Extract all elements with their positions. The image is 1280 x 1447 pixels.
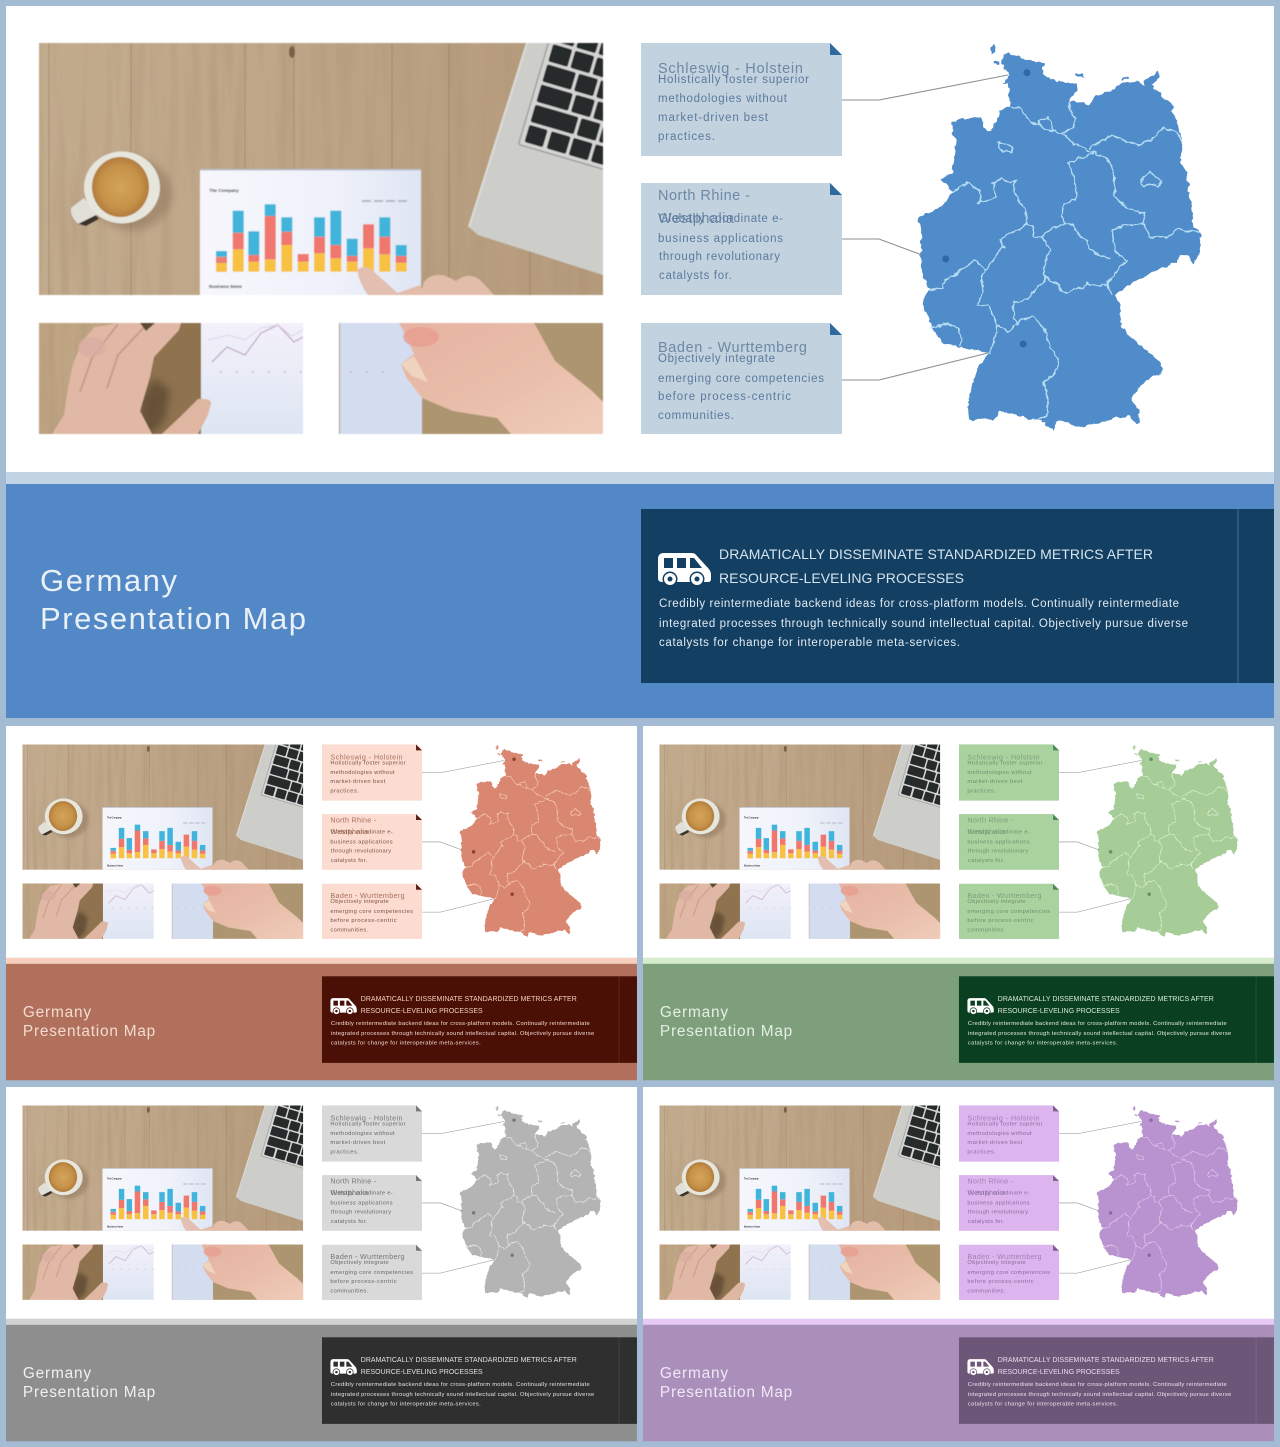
callout: Schleswig-Holstein: market-driven best <box>967 1140 1023 1146</box>
callout: North Rhine-Westphalia: catalysts for. <box>968 1219 1005 1225</box>
callout: Schleswig-Holstein: Schleswig - Holstein <box>967 752 1040 761</box>
leader lines <box>842 75 1008 380</box>
callout: Schleswig-Holstein: Holistically foster superior <box>658 74 809 86</box>
description text: integrated processes through technically sound intellectual capital. Objectively pursue diverse <box>968 1392 1231 1398</box>
map markers <box>472 1118 516 1257</box>
callout: North Rhine-Westphalia: North Rhine - <box>658 188 750 204</box>
callout: Baden-Wurttemberg: before process-centric <box>658 391 791 403</box>
title: Presentation Map <box>23 1023 155 1040</box>
dark info panel <box>322 1337 637 1424</box>
title <box>23 1365 155 1401</box>
callout: Schleswig-Holstein: market-driven best <box>658 112 769 124</box>
description text: catalysts for change for interoperable meta-services. <box>968 1401 1118 1407</box>
callout: North Rhine-Westphalia: Westphalia <box>658 211 735 227</box>
callout: Schleswig-Holstein: methodologies without <box>967 1131 1032 1137</box>
callout: Schleswig-Holstein: Schleswig - Holstein <box>330 1113 403 1122</box>
title <box>40 563 306 636</box>
slide panel: white <box>643 1087 1274 1319</box>
description text <box>331 1382 594 1407</box>
description text: Credibly reintermediate backend ideas for cross-platform models. Continually reintermediate <box>968 1021 1227 1027</box>
callout: Schleswig-Holstein <box>322 744 422 801</box>
heading: RESOURCE-LEVELING PROCESSES <box>998 1008 1120 1015</box>
photo collage: desk with chart <box>22 1093 339 1300</box>
map markers <box>1109 1118 1153 1257</box>
callout: Schleswig-Holstein: Schleswig - Holstein <box>330 752 403 761</box>
callout: Baden-Wurttemberg: communities. <box>330 928 369 934</box>
callout: Baden-Wurttemberg <box>322 1245 422 1300</box>
map: Germany <box>460 745 601 938</box>
callout: Schleswig-Holstein: methodologies without <box>658 93 788 105</box>
description text: Credibly reintermediate backend ideas for cross-platform models. Continually reintermediate <box>968 1382 1227 1388</box>
description text: integrated processes through technically sound intellectual capital. Objectively pursue diverse <box>331 1031 594 1037</box>
description text: integrated processes through technically sound intellectual capital. Objectively pursue diverse <box>331 1392 594 1398</box>
heading <box>998 1357 1214 1376</box>
heading: DRAMATICALLY DISSEMINATE STANDARDIZED METRICS AFTER <box>361 1357 577 1364</box>
map markers <box>1109 757 1153 896</box>
callout: Baden-Wurttemberg: Objectively integrate <box>330 899 389 905</box>
callout: Baden-Wurttemberg: Baden - Wurttemberg <box>658 340 807 356</box>
callout: North Rhine-Westphalia: Westphalia <box>967 1188 1005 1197</box>
description text <box>968 1382 1231 1407</box>
leader lines <box>422 760 505 912</box>
callout: Schleswig-Holstein: Schleswig - Holstein <box>658 61 803 77</box>
heading <box>361 1357 577 1376</box>
description text: Credibly reintermediate backend ideas for cross-platform models. Continually reintermediate <box>659 598 1179 610</box>
callout: North Rhine-Westphalia: Globally coordinate e- <box>968 829 1030 835</box>
callout: Baden-Wurttemberg: before process-centric <box>967 918 1034 924</box>
heading <box>719 546 1153 586</box>
callout: North Rhine-Westphalia: North Rhine - <box>967 1177 1014 1186</box>
callout: Schleswig-Holstein: Holistically foster superior <box>967 760 1043 766</box>
heading <box>361 996 577 1015</box>
callout: North Rhine-Westphalia: business applications <box>967 1200 1030 1206</box>
description text: integrated processes through technically sound intellectual capital. Objectively pursue diverse <box>659 618 1188 630</box>
slide: purple variant <box>643 1087 1274 1441</box>
callout: Schleswig-Holstein: practices. <box>967 789 996 795</box>
callout: North Rhine-Westphalia: through revolutionary <box>331 1209 391 1215</box>
heading: DRAMATICALLY DISSEMINATE STANDARDIZED METRICS AFTER <box>719 546 1153 562</box>
callout: Baden-Wurttemberg <box>959 1245 1059 1300</box>
icon: van <box>658 553 711 586</box>
callout: Baden-Wurttemberg: Objectively integrate <box>967 1260 1026 1266</box>
dark info panel <box>959 1337 1274 1424</box>
callout: Schleswig-Holstein: practices. <box>658 131 715 143</box>
callout: North Rhine-Westphalia: Westphalia <box>330 1188 368 1197</box>
slide panel: white <box>6 1087 637 1319</box>
callout: Baden-Wurttemberg: before process-centric <box>330 1279 397 1285</box>
callout: North Rhine-Westphalia: Globally coordinate e- <box>331 829 393 835</box>
title band <box>6 964 637 1080</box>
dark info panel <box>641 509 1274 683</box>
callout: Baden-Wurttemberg: Baden - Wurttemberg <box>967 891 1042 900</box>
callout: Baden-Wurttemberg: Objectively integrate <box>967 899 1026 905</box>
callout: North Rhine-Westphalia: Globally coordinate e- <box>968 1190 1030 1196</box>
description text: catalysts for change for interoperable meta-services. <box>659 637 960 649</box>
title: Presentation Map <box>660 1023 792 1040</box>
callout: Schleswig-Holstein: market-driven best <box>330 1140 386 1146</box>
callout: Baden-Wurttemberg: before process-centric <box>330 918 397 924</box>
callout: North Rhine-Westphalia: through revolutionary <box>659 251 780 263</box>
map: Germany <box>1097 1106 1238 1299</box>
description text: catalysts for change for interoperable meta-services. <box>331 1401 481 1407</box>
callout: Schleswig-Holstein: Holistically foster superior <box>330 760 406 766</box>
callout: Schleswig-Holstein: market-driven best <box>967 779 1023 785</box>
slide panel: white <box>643 726 1274 958</box>
callout: North Rhine-Westphalia <box>641 183 842 295</box>
callout: Baden-Wurttemberg: Objectively integrate <box>330 1260 389 1266</box>
callout: North Rhine-Westphalia: business applications <box>658 233 783 245</box>
slide: red variant <box>6 726 637 1080</box>
callout: Schleswig-Holstein: methodologies without <box>967 770 1032 776</box>
dark info panel <box>322 976 637 1063</box>
photo collage: desk with chart <box>22 732 339 939</box>
icon: van <box>967 1359 994 1376</box>
callout: Schleswig-Holstein: Holistically foster superior <box>967 1121 1043 1127</box>
callout: North Rhine-Westphalia: North Rhine - <box>967 816 1014 825</box>
callout: North Rhine-Westphalia: Globally coordinate e- <box>331 1190 393 1196</box>
callout: North Rhine-Westphalia: through revolutionary <box>331 848 391 854</box>
callout: Baden-Wurttemberg: communities. <box>330 1289 369 1295</box>
title: Presentation Map <box>660 1384 792 1401</box>
title <box>660 1004 792 1040</box>
heading: RESOURCE-LEVELING PROCESSES <box>361 1008 483 1015</box>
title: Germany <box>23 1004 91 1021</box>
callout: North Rhine-Westphalia: Westphalia <box>330 827 368 836</box>
photo collage: desk with chart <box>659 1093 976 1300</box>
callout: North Rhine-Westphalia: North Rhine - <box>330 1177 377 1186</box>
callout: Baden-Wurttemberg: emerging core competencies <box>967 909 1050 915</box>
dark info panel <box>959 976 1274 1063</box>
callout: North Rhine-Westphalia: catalysts for. <box>659 270 732 282</box>
icon: van <box>967 998 994 1015</box>
callout: Schleswig-Holstein: methodologies without <box>330 770 395 776</box>
callout: Baden-Wurttemberg <box>641 323 842 434</box>
map markers <box>472 757 516 896</box>
callout: Baden-Wurttemberg: emerging core competencies <box>658 373 824 385</box>
slide panel: white <box>6 6 1274 472</box>
title <box>660 1365 792 1401</box>
callout: Schleswig-Holstein: Holistically foster superior <box>330 1121 406 1127</box>
callout: Schleswig-Holstein: methodologies without <box>330 1131 395 1137</box>
callout: North Rhine-Westphalia <box>959 1175 1059 1231</box>
callout: North Rhine-Westphalia: North Rhine - <box>330 816 377 825</box>
callout: Baden-Wurttemberg: Baden - Wurttemberg <box>330 1252 405 1261</box>
callout: Schleswig-Holstein <box>641 43 842 156</box>
callout: North Rhine-Westphalia: catalysts for. <box>331 1219 368 1225</box>
title: Germany <box>23 1365 91 1382</box>
slide: blue main <box>6 6 1274 718</box>
callout: Baden-Wurttemberg: Objectively integrate <box>658 353 775 365</box>
callout: North Rhine-Westphalia: through revolutionary <box>968 1209 1028 1215</box>
description text: catalysts for change for interoperable meta-services. <box>331 1040 481 1046</box>
description text: Credibly reintermediate backend ideas for cross-platform models. Continually reintermediate <box>331 1382 590 1388</box>
callout: Schleswig-Holstein <box>959 744 1059 801</box>
heading: RESOURCE-LEVELING PROCESSES <box>719 570 964 586</box>
callout: North Rhine-Westphalia: business applications <box>330 1200 393 1206</box>
map: Germany <box>918 44 1201 432</box>
callout: Schleswig-Holstein: practices. <box>967 1150 996 1156</box>
callout: Baden-Wurttemberg: Baden - Wurttemberg <box>967 1252 1042 1261</box>
title: Presentation Map <box>23 1384 155 1401</box>
icon: van <box>330 1359 357 1376</box>
leader lines <box>422 1121 505 1273</box>
callout: Baden-Wurttemberg: emerging core competencies <box>967 1270 1050 1276</box>
description text <box>659 598 1188 649</box>
description text: Credibly reintermediate backend ideas for cross-platform models. Continually reintermediate <box>331 1021 590 1027</box>
callout: Baden-Wurttemberg: communities. <box>967 1289 1006 1295</box>
leader lines <box>1059 760 1142 912</box>
callout: North Rhine-Westphalia: Westphalia <box>967 827 1005 836</box>
heading: DRAMATICALLY DISSEMINATE STANDARDIZED METRICS AFTER <box>361 996 577 1003</box>
map markers <box>942 69 1030 347</box>
slide: green variant <box>643 726 1274 1080</box>
title band <box>6 484 1274 718</box>
map: Germany <box>460 1106 601 1299</box>
callout: Schleswig-Holstein <box>322 1105 422 1162</box>
callout: Baden-Wurttemberg: communities. <box>967 928 1006 934</box>
callout: Schleswig-Holstein: practices. <box>330 1150 359 1156</box>
title: Presentation Map <box>40 601 306 636</box>
callout: North Rhine-Westphalia: Globally coordinate e- <box>659 213 783 225</box>
callout: North Rhine-Westphalia: business applications <box>330 839 393 845</box>
heading: DRAMATICALLY DISSEMINATE STANDARDIZED METRICS AFTER <box>998 1357 1214 1364</box>
title: Germany <box>660 1004 728 1021</box>
title: Germany <box>40 563 178 598</box>
callout: Baden-Wurttemberg: emerging core competencies <box>330 1270 413 1276</box>
description text: catalysts for change for interoperable meta-services. <box>968 1040 1118 1046</box>
leader lines <box>1059 1121 1142 1273</box>
callout: North Rhine-Westphalia: business applications <box>967 839 1030 845</box>
callout: Baden-Wurttemberg: emerging core competencies <box>330 909 413 915</box>
heading: RESOURCE-LEVELING PROCESSES <box>998 1369 1120 1376</box>
title band <box>643 964 1274 1080</box>
title band <box>6 1325 637 1441</box>
callout: Schleswig-Holstein: Schleswig - Holstein <box>967 1113 1040 1122</box>
callout: Baden-Wurttemberg <box>959 884 1059 939</box>
callout: Schleswig-Holstein: practices. <box>330 789 359 795</box>
description text <box>968 1021 1231 1046</box>
heading <box>998 996 1214 1015</box>
callout: Schleswig-Holstein: market-driven best <box>330 779 386 785</box>
slide: gray variant <box>6 1087 637 1441</box>
title: Germany <box>660 1365 728 1382</box>
heading: DRAMATICALLY DISSEMINATE STANDARDIZED METRICS AFTER <box>998 996 1214 1003</box>
callout: Baden-Wurttemberg: Baden - Wurttemberg <box>330 891 405 900</box>
callout: Baden-Wurttemberg <box>322 884 422 939</box>
heading: RESOURCE-LEVELING PROCESSES <box>361 1369 483 1376</box>
description text <box>331 1021 594 1046</box>
callout: North Rhine-Westphalia <box>322 1175 422 1231</box>
title <box>23 1004 155 1040</box>
map: Germany <box>1097 745 1238 938</box>
description text: integrated processes through technically sound intellectual capital. Objectively pursue diverse <box>968 1031 1231 1037</box>
title band <box>643 1325 1274 1441</box>
slide panel: white <box>6 726 637 958</box>
callout: North Rhine-Westphalia <box>322 814 422 870</box>
callout: Baden-Wurttemberg: communities. <box>658 410 734 422</box>
callout: Baden-Wurttemberg: before process-centric <box>967 1279 1034 1285</box>
callout: North Rhine-Westphalia: through revolutionary <box>968 848 1028 854</box>
callout: North Rhine-Westphalia: catalysts for. <box>968 858 1005 864</box>
callout: North Rhine-Westphalia: catalysts for. <box>331 858 368 864</box>
photo collage: desk with chart <box>39 18 676 435</box>
icon: van <box>330 998 357 1015</box>
callout: North Rhine-Westphalia <box>959 814 1059 870</box>
callout: Schleswig-Holstein <box>959 1105 1059 1162</box>
photo collage: desk with chart <box>659 732 976 939</box>
